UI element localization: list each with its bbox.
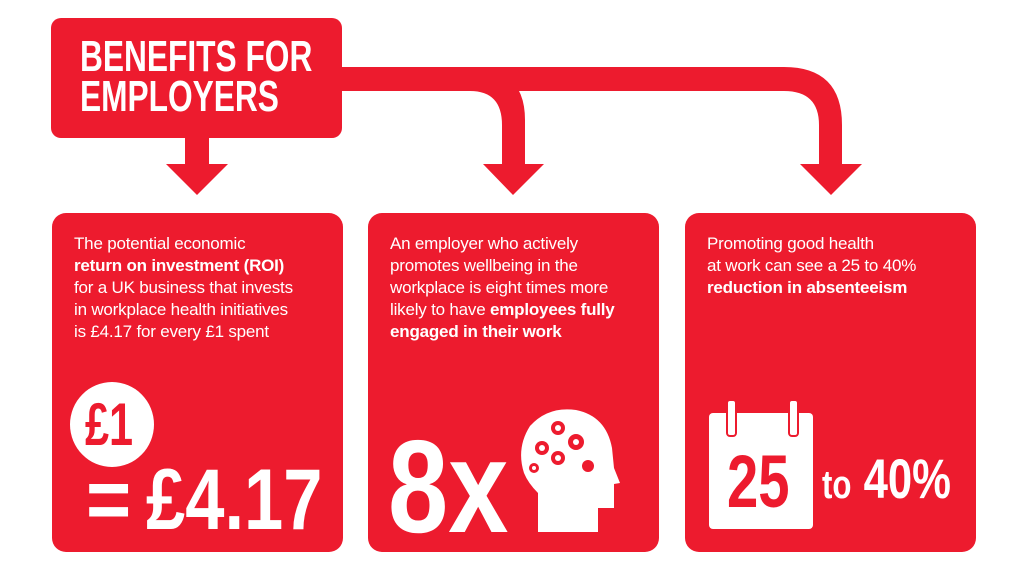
text: ROI: in workplace health initiatives [74, 300, 288, 319]
stat: equals: = [86, 452, 131, 548]
stat: 25: 25 [727, 440, 790, 523]
text: absenteeism [707, 234, 916, 297]
panel: engagement [368, 213, 659, 552]
text: ROI [74, 234, 293, 341]
title: BENEFITS FOR [80, 32, 312, 81]
arrow: left [166, 130, 228, 195]
stat: to 40%: to 40% [822, 447, 951, 510]
icon: £1 circle [70, 382, 154, 467]
text: absenteeism: at work can see a 25 to 40% [707, 256, 916, 275]
stat: 8x: 8x [388, 413, 508, 560]
title box [51, 18, 342, 138]
icon: calendar [709, 413, 813, 529]
text: ROI: for a UK business that invests [74, 278, 293, 297]
stat: £4.17: £4.17 [146, 452, 322, 548]
text: ROI: return on investment (ROI) [74, 256, 284, 275]
text: engagement: promotes wellbeing in the [390, 256, 578, 275]
arrow: middle [330, 67, 544, 195]
panel: absenteeism [685, 213, 976, 552]
text: absenteeism: Promoting good health [707, 234, 874, 253]
title [80, 32, 312, 121]
icon: £1 circle: £1 [85, 391, 133, 458]
panel: ROI [52, 213, 343, 552]
arrow: right [460, 67, 862, 195]
text: engagement: An employer who actively [390, 234, 578, 253]
icon: head with gears [521, 409, 620, 532]
text: engagement [390, 234, 615, 341]
text: engagement: likely to have employees fully [390, 300, 615, 319]
text: engagement: engaged in their work [390, 322, 562, 341]
text: engagement: workplace is eight times more [390, 278, 608, 297]
text: ROI: The potential economic [74, 234, 245, 253]
title: EMPLOYERS [80, 72, 279, 121]
text: ROI: is £4.17 for every £1 spent [74, 322, 269, 341]
text: absenteeism: reduction in absenteeism [707, 278, 907, 297]
